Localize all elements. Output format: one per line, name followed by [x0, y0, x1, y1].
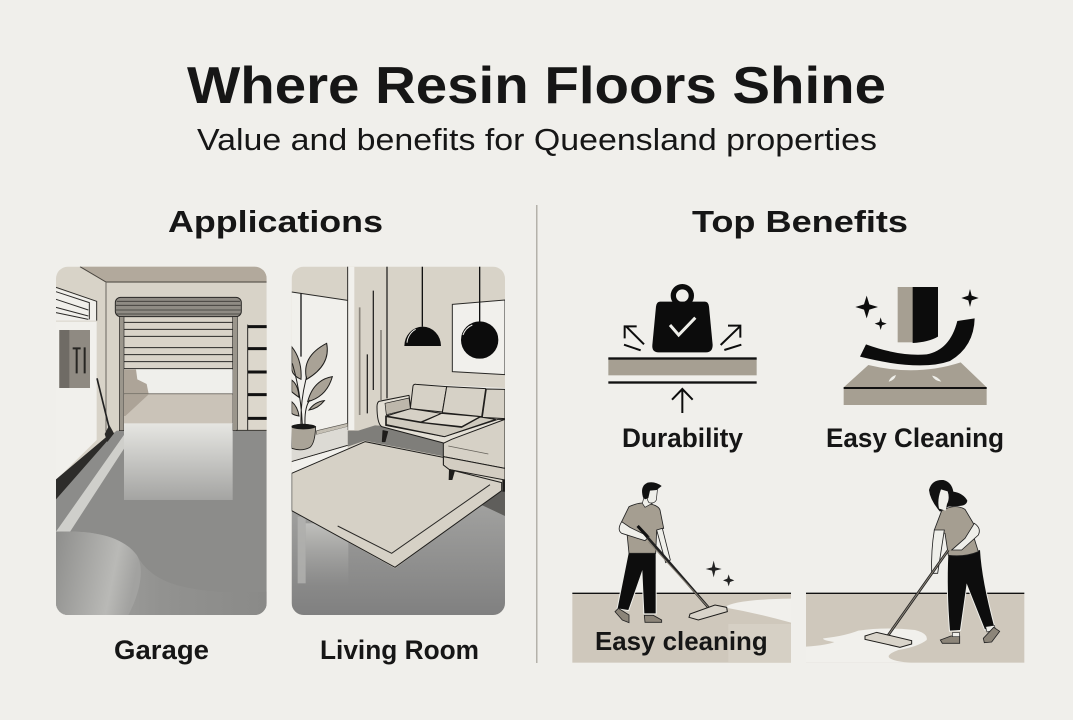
- floor: [292, 490, 505, 615]
- black skirting: [56, 433, 114, 499]
- window: [292, 267, 348, 437]
- sofa legs over rug: [449, 469, 455, 480]
- roller door: [115, 297, 241, 431]
- panel: garage illustration: [56, 267, 267, 615]
- dark floor behind rug: [348, 425, 445, 457]
- curtain: [348, 267, 387, 430]
- panel: living room illustration: [291, 267, 505, 615]
- heading: Top Benefits: Top Benefits: [692, 204, 908, 239]
- title: Where Resin Floors Shine: [187, 57, 886, 115]
- pendant lamp 1: [404, 267, 441, 346]
- caption: Easy cleaning: Easy cleaning: [595, 626, 768, 656]
- man: [615, 482, 708, 623]
- outside view: [124, 369, 233, 394]
- label: Garage: Garage: [114, 635, 209, 665]
- label: Durability: Durability: [622, 423, 743, 453]
- mop head: [865, 632, 912, 647]
- illustration: woman mopping floor: [806, 480, 1024, 663]
- pendant lamp 2: [462, 267, 498, 358]
- mop head: [689, 605, 727, 620]
- icon: easy cleaning squeegee: [844, 287, 987, 405]
- floor: [572, 593, 791, 663]
- arrows: [624, 326, 741, 413]
- white lower side wall: [56, 322, 97, 480]
- infographic: [56, 66, 1024, 664]
- woman: [888, 480, 1000, 643]
- label: Living Room: Living Room: [320, 635, 479, 665]
- wall tool panel: [59, 330, 90, 388]
- illustration: man mopping floor: [572, 482, 791, 663]
- broom: [97, 378, 114, 442]
- rug: [292, 442, 502, 567]
- sparkles: [706, 561, 734, 586]
- floor: [806, 593, 1024, 663]
- floor slab: [608, 357, 757, 384]
- weight: [652, 287, 713, 352]
- picture on wall: [452, 300, 505, 375]
- side window: [56, 287, 97, 321]
- chaise lounge: [443, 419, 505, 480]
- icon: durability weight on floor: [608, 287, 757, 413]
- sofa: [377, 384, 505, 443]
- glossy floor sheen: [128, 560, 267, 615]
- ceiling: [80, 267, 267, 283]
- floor: [56, 431, 267, 615]
- reflection: [298, 517, 306, 583]
- light floor stripe: [56, 435, 124, 532]
- heading: Applications: Applications: [168, 204, 383, 239]
- subtitle: Value and benefits for Queensland properties: [197, 122, 877, 157]
- shelves: [247, 325, 267, 431]
- bright floor by window: [292, 427, 348, 461]
- plant: [291, 343, 332, 450]
- label: Easy Cleaning: Easy Cleaning: [826, 423, 1004, 453]
- floor reflection: [124, 423, 233, 500]
